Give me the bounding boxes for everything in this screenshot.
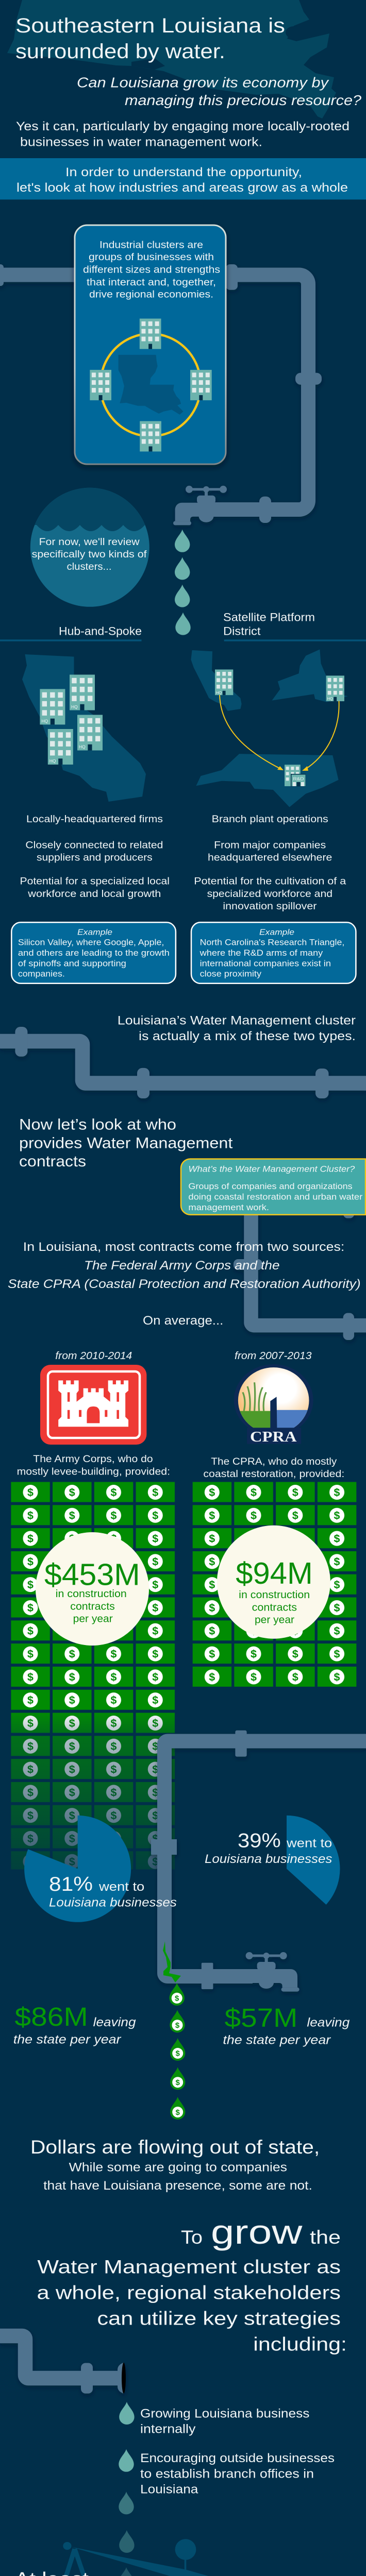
panel: example research triangle: international companies exist in	[200, 959, 331, 968]
heading: satellite platform district: District	[223, 624, 261, 638]
text block: hub-and-spoke traits: Locally-headquartered firms	[26, 814, 163, 825]
text: two contract sources: On average...	[143, 1314, 223, 1328]
icon: green money drops: $	[175, 2021, 180, 2030]
chart: army corps dollar bills	[8, 1482, 178, 1871]
banner: In order to understand the opportunity,	[65, 165, 302, 179]
answer text: businesses in water management work.	[20, 135, 262, 149]
map: satellite states with arrows: HQ	[327, 697, 333, 701]
heading: who provides contracts: provides Water Management	[19, 1135, 233, 1152]
callout: $453M: in construction	[56, 1588, 127, 1600]
panel: example silicon valley: companies.	[18, 970, 65, 979]
callout: $453M: contracts	[70, 1601, 115, 1612]
callout: $94M: $94M	[236, 1556, 313, 1590]
panel: example silicon valley: of spinoffs and supporting	[18, 959, 126, 968]
text: CPRA provided	[203, 1456, 344, 1480]
pipe behind callout	[234, 1208, 366, 1340]
text: two contract sources: State CPRA (Coastal Protection and Restoration Authority)	[8, 1277, 361, 1291]
title: surrounded by water.	[15, 40, 225, 63]
text block: satellite traits: Potential for the cultivation of a	[194, 876, 346, 887]
card text: that interact and, together,	[87, 277, 216, 288]
heading: who provides contracts: contracts	[19, 1153, 86, 1170]
callout: what is the water management cluster	[181, 1159, 365, 1215]
text: dollars flowing out: Dollars are flowing out of state,	[30, 2137, 320, 2158]
label: from 2007-2013: from 2007-2013	[235, 1350, 311, 1362]
stat: $57M leaving: $57M	[225, 2003, 297, 2032]
text block: hub-and-spoke traits: Potential for a specialized local	[20, 876, 170, 887]
text: dollars flowing out: that have Louisiana presence, some are not.	[43, 2179, 312, 2193]
card text: Industrial clusters are	[99, 240, 203, 250]
panel: example silicon valley	[11, 922, 176, 984]
banner: let's look at how industries and areas grow as a whole	[16, 181, 348, 195]
text: strategies list: Growing Louisiana business	[140, 2407, 309, 2420]
callout: what is the water management cluster: doing coastal restoration and urban water	[188, 1192, 363, 1201]
chart: CPRA dollar bills	[193, 1482, 357, 1687]
text: dollars flowing out	[30, 2137, 320, 2193]
stat: 39 percent: went to	[286, 1836, 332, 1851]
panel: example research triangle: where the R&D arms of many	[199, 948, 323, 958]
stat: $86M leaving: leaving	[93, 2015, 136, 2029]
icon: green money drops: $	[175, 1994, 179, 2003]
heading: to grow	[37, 2213, 347, 2354]
callout: what is the water management cluster: Groups of companies and organizations	[188, 1182, 353, 1191]
label: from 2010-2014: from 2010-2014	[55, 1350, 132, 1362]
callout: $94M: in construction	[239, 1589, 310, 1601]
answer text: Yes it can, particularly by engaging more locally-rooted	[16, 120, 350, 133]
card text	[83, 240, 220, 300]
text: dollars flowing out: While some are going to companies	[69, 2161, 287, 2174]
icon: strategy and fading drops	[119, 2402, 135, 2576]
text: strategies list: Encouraging outside businesses	[140, 2451, 335, 2465]
icon: green money drops: $	[176, 2108, 180, 2117]
card text: groups of businesses with	[89, 252, 214, 263]
panel: example silicon valley: and others are leading to the growth	[18, 948, 170, 958]
text: mix of two types: is actually a mix of these two types.	[139, 1029, 356, 1043]
answer text	[16, 120, 350, 149]
heading: to grow: a whole, regional stakeholders	[37, 2282, 341, 2303]
panel: industrial clusters card	[75, 225, 226, 464]
icon: water drops	[175, 530, 191, 635]
icon: green money drops	[169, 1983, 185, 2120]
stat: 39 percent: 39%	[238, 1830, 281, 1852]
heading: satellite platform district	[223, 611, 366, 641]
icon: CPRA logo	[234, 1364, 313, 1445]
icon: scales of justice	[14, 2539, 352, 2576]
heading: to grow: the	[310, 2227, 341, 2248]
text: two contract sources: The Federal Army Corps and the	[84, 1259, 279, 1273]
text block: satellite traits: specialized workforce and	[207, 889, 332, 900]
heading: who provides contracts: Now let’s look at who	[19, 1116, 176, 1133]
callout: for now circle: clusters...	[67, 562, 111, 572]
callout: for now circle: specifically two kinds of	[32, 549, 147, 560]
icon: green money drops: $	[176, 2049, 180, 2058]
text: strategies list: Louisiana	[140, 2482, 198, 2496]
heading: to grow: To	[181, 2227, 203, 2248]
question	[77, 74, 361, 108]
heading: who provides contracts	[19, 1116, 233, 1170]
chart: pie 39 percent	[287, 1816, 340, 1905]
title	[15, 14, 285, 63]
stat: 39 percent: Louisiana businesses	[205, 1852, 332, 1866]
callout: $94M: per year	[255, 1614, 294, 1625]
text: CPRA provided: The CPRA, who do mostly	[211, 1456, 337, 1467]
text: army corps provided: mostly levee-building, provided:	[17, 1466, 170, 1477]
callout: $94M: contracts	[252, 1602, 297, 1613]
map: California hub with four HQ buildings: HQ	[41, 718, 48, 723]
chart: pie 81 percent	[24, 1816, 131, 1922]
question: managing this precious resource?	[125, 92, 361, 108]
panel: example silicon valley: Silicon Valley, where Google, Apple,	[18, 938, 164, 947]
stat: $57M leaving	[223, 2003, 350, 2047]
text: strategies list: to establish branch offices in	[140, 2467, 314, 2481]
text block: hub-and-spoke traits: suppliers and producers	[37, 853, 153, 863]
text: army corps provided: The Army Corps, who do	[33, 1454, 153, 1465]
text block: satellite traits: headquartered elsewhere	[208, 853, 332, 863]
callout: what is the water management cluster: management work.	[188, 1203, 269, 1212]
heading: to grow: grow	[211, 2213, 303, 2251]
stat: 81 percent: 81%	[49, 1873, 93, 1895]
callout: for now circle: For now, we'll review	[39, 537, 140, 548]
icon: army corps castle logo	[40, 1365, 146, 1445]
text block: hub-and-spoke traits	[20, 814, 170, 900]
text: mix of two types: Louisiana’s Water Management cluster	[118, 1014, 356, 1028]
panel: example research triangle	[191, 922, 356, 984]
text block: hub-and-spoke traits: Closely connected to related	[25, 840, 163, 851]
callout: $453M: per year	[73, 1614, 113, 1625]
stat: 81 percent: went to	[98, 1880, 144, 1894]
title: Southeastern Louisiana is	[15, 14, 285, 37]
icon: green money drops: $	[176, 2078, 180, 2087]
map: California hub with four HQ buildings	[22, 654, 146, 802]
card text: different sizes and strengths	[83, 265, 220, 276]
stat: $57M leaving: the state per year	[223, 2033, 331, 2047]
heading: to grow: including:	[253, 2333, 347, 2354]
map: satellite states with arrows: HQ	[216, 690, 222, 695]
stat: $57M leaving: leaving	[307, 2016, 350, 2030]
text block: satellite traits	[194, 814, 346, 912]
heading: satellite platform district: Satellite Platform	[223, 611, 315, 624]
text: strategies list	[140, 2407, 335, 2496]
text: CPRA provided: coastal restoration, provided:	[203, 1469, 344, 1480]
panel: example research triangle: Example	[259, 928, 294, 937]
stat: $86M leaving: $86M	[14, 2002, 88, 2031]
map: satellite states with arrows	[191, 649, 348, 807]
stat: 81 percent: Louisiana businesses	[49, 1895, 177, 1909]
stat: $86M leaving	[13, 2002, 136, 2047]
map: California hub with four HQ buildings: HQ	[71, 704, 78, 709]
question: Can Louisiana grow its economy by	[77, 74, 329, 91]
stat: 81 percent	[49, 1873, 177, 1909]
pipe with open end	[0, 2336, 126, 2394]
text block: satellite traits: From major companies	[214, 840, 326, 851]
card text: drive regional economies.	[89, 290, 213, 300]
pipe across section	[0, 1027, 366, 1098]
callout: $453M	[36, 1532, 149, 1646]
panel: example research triangle: close proximity	[200, 970, 262, 979]
map: California hub with four HQ buildings: HQ	[79, 744, 86, 749]
callout: $453M: $453M	[44, 1558, 140, 1592]
heading: hub-and-spoke	[0, 624, 142, 641]
map: satellite states with arrows: R&D	[293, 776, 304, 781]
map: California hub with four HQ buildings: HQ	[49, 758, 56, 764]
panel: example silicon valley: Example	[77, 928, 112, 937]
text: army corps provided	[17, 1454, 170, 1477]
callout: $94M	[217, 1526, 330, 1639]
panel: example research triangle: North Carolina's Research Triangle,	[200, 938, 344, 947]
text block: satellite traits: Branch plant operations	[212, 814, 328, 825]
heading: to grow: Water Management cluster as	[37, 2256, 341, 2277]
heading: to grow: can utilize key strategies	[97, 2308, 341, 2329]
text: two contract sources: In Louisiana, most contracts come from two sources:	[23, 1240, 344, 1254]
text: two contract sources	[8, 1240, 361, 1328]
callout: what is the water management cluster: What’s the Water Management Cluster?	[188, 1165, 355, 1174]
text block: satellite traits: innovation spillover	[223, 901, 317, 912]
background map: Louisiana	[7, 0, 336, 118]
text: mix of two types	[118, 1014, 356, 1043]
heading: hub-and-spoke: Hub-and-Spoke	[59, 624, 142, 638]
pipe with faucet and crack	[151, 1731, 366, 1992]
icon: CPRA logo: CPRA	[250, 1429, 297, 1445]
text: strategies list: internally	[140, 2422, 195, 2436]
stat: $86M leaving: the state per year	[13, 2033, 122, 2047]
callout: for now circle	[30, 487, 149, 607]
stat: 39 percent	[205, 1830, 332, 1866]
crack in pipe	[163, 1941, 181, 1982]
pipe with faucet	[0, 264, 322, 525]
banner	[0, 158, 366, 199]
hub diagram	[90, 318, 212, 451]
text block: hub-and-spoke traits: workforce and local growth	[27, 889, 161, 900]
